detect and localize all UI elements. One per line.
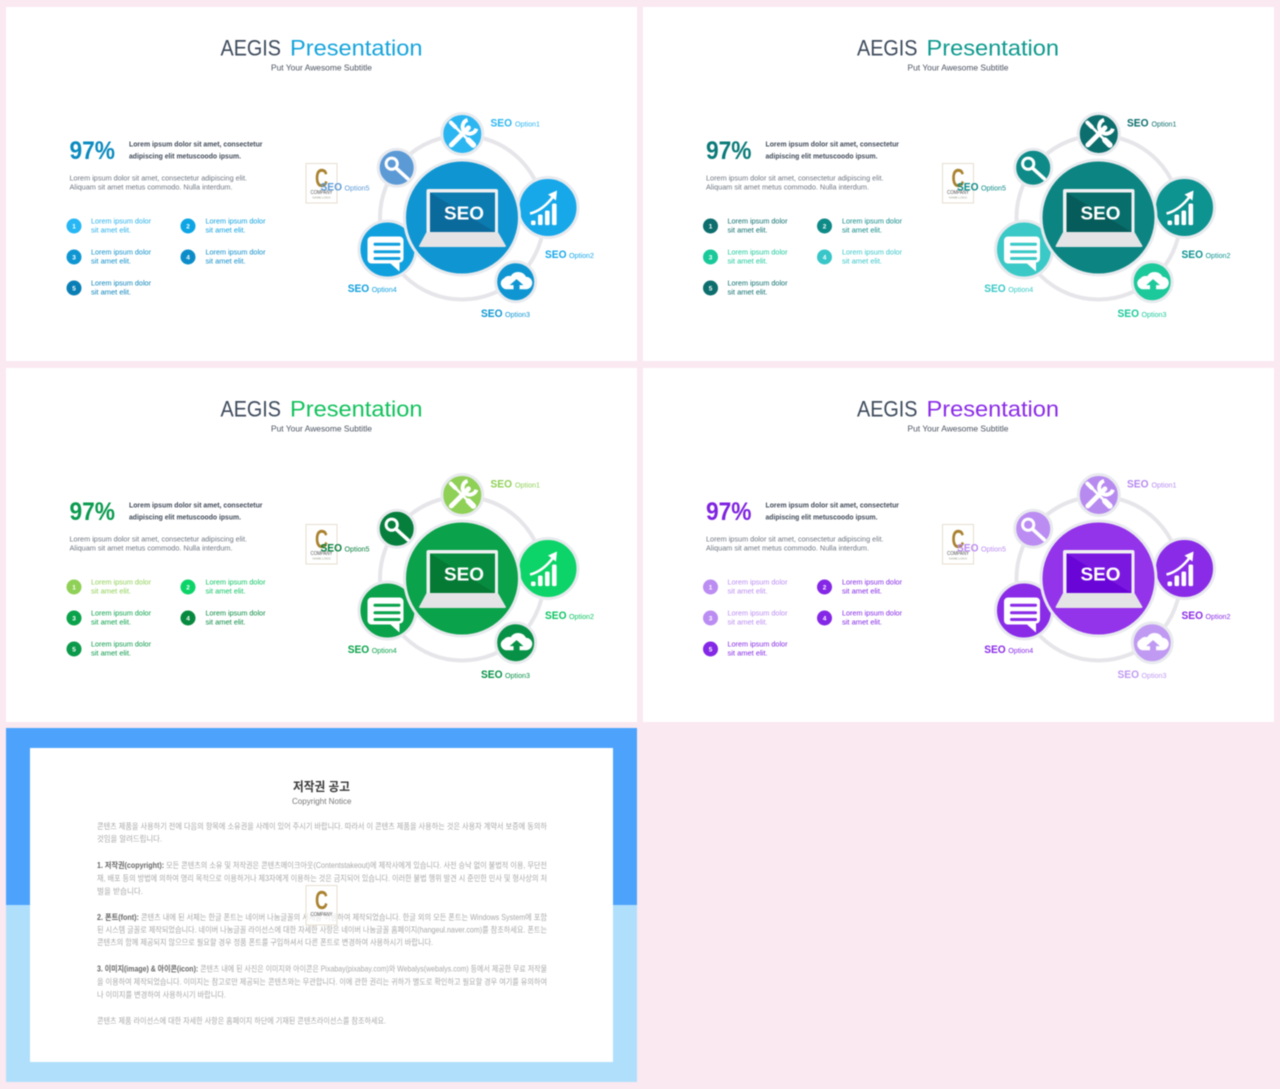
notice section 1	[97, 860, 547, 896]
label: option 3: Option3	[1142, 310, 1166, 319]
icon: tools	[442, 474, 483, 516]
label: option 3: SEO	[481, 669, 503, 681]
icon: growth chart	[518, 538, 578, 598]
label: option 1: SEO	[1127, 118, 1149, 130]
label: option 5: SEO	[957, 182, 979, 194]
list: five items	[703, 578, 903, 658]
notice section 1: 1. 저작권(copyright): 모든 콘텐츠의 소유 및 저작권은 콘텐츠메이크아웃(Contentstakeout)에 제작사에게 있습니다. 사전 승낙 없이 불법적 이용, 무단전	[97, 860, 547, 870]
list: five items: 5	[72, 286, 76, 292]
subtitle: Put Your Awesome Subtitle	[908, 62, 1009, 72]
title	[220, 396, 422, 422]
logo watermark: COMPANY	[310, 912, 333, 918]
list: five items: 2	[823, 584, 827, 592]
icon: search	[378, 510, 415, 547]
notice intro: 것임을 알려드립니다.	[97, 834, 162, 844]
list: five items: 4	[823, 616, 827, 622]
icon: laptop with SEO	[1041, 160, 1156, 275]
notice section 3: 을 이용하여 제작되었습니다. 이미지는 참고로만 제공되는 콘텐츠와는 무관합니다. 이에 관한 권리는 귀하가 별도로 확인하고 필요할 경우 여기를 유의하여	[97, 976, 547, 986]
list: five items: sit amet elit.	[728, 618, 768, 626]
stat heading: adipiscing elit metuscoodo ipsum.	[766, 512, 878, 522]
list: five items: Lorem ipsum dolor	[91, 278, 152, 288]
panel: teal slide	[643, 7, 1274, 361]
body text: Aliquam sit amet metus commodo. Nulla interdum.	[706, 182, 869, 192]
label: option 5: SEO	[320, 542, 342, 554]
icon: growth chart	[518, 178, 578, 238]
icon: chat	[359, 582, 416, 639]
label: option 3	[481, 308, 530, 320]
icon: laptop with SEO	[404, 521, 520, 636]
list: five items: Lorem ipsum dolor	[206, 608, 266, 618]
label: option 5: SEO	[320, 182, 342, 194]
title: Presentation	[926, 396, 1059, 422]
list: five items: sit amet elit.	[728, 288, 768, 296]
label: option 5: SEO	[957, 542, 979, 554]
body text	[706, 174, 884, 192]
list: five items: sit amet elit.	[206, 226, 246, 234]
body text	[70, 174, 247, 192]
list: five items: Lorem ipsum dolor	[842, 216, 903, 226]
body text: Lorem ipsum dolor sit amet, consectetur adipiscing elit.	[70, 534, 247, 544]
notice subheading: Copyright Notice	[292, 796, 352, 806]
logo watermark: NAME LOGO	[312, 196, 331, 200]
label: option 2	[1182, 610, 1230, 622]
stat heading: Lorem ipsum dolor sit amet, consectetur	[766, 140, 899, 148]
subtitle: Put Your Awesome Subtitle	[908, 424, 1009, 434]
stat heading	[766, 500, 899, 522]
diagram: SEO hub	[957, 114, 1230, 320]
logo watermark: COMPANY	[310, 190, 333, 196]
list: five items: 1	[72, 584, 76, 592]
list: five items: sit amet elit.	[206, 618, 246, 626]
list: five items: 3	[72, 254, 76, 262]
notice section 1: 재, 배포 등의 방법에 의하여 영리 목적으로 이용하거나 제3자에게 이용하는 것은 금지되어 있습니다. 이러한 불법 행위 발견 시 준민한 민사 및 형사상의 처	[97, 873, 547, 883]
list: five items: sit amet elit.	[206, 256, 246, 266]
body text: Lorem ipsum dolor sit amet, consectetur adipiscing elit.	[706, 534, 884, 544]
list: five items: 4	[186, 616, 190, 622]
label: option 5: Option5	[344, 184, 370, 192]
icon: chat	[996, 582, 1052, 639]
label: option 1: Option1	[515, 120, 540, 128]
label: option 4	[984, 283, 1033, 295]
list: five items: Lorem ipsum dolor	[728, 216, 788, 226]
label: option 3: Option3	[1142, 671, 1166, 680]
list: five items: sit amet elit.	[842, 618, 882, 626]
label: option 3: Option3	[505, 671, 530, 680]
diagram: SEO hub	[957, 474, 1230, 681]
label: option 4: Option4	[1008, 285, 1033, 294]
list: five items: sit amet elit.	[728, 256, 768, 266]
list: five items: 3	[709, 254, 713, 262]
label: option 3: SEO	[1118, 308, 1139, 320]
list: five items: Lorem ipsum dolor	[91, 248, 152, 256]
label: option 1	[490, 478, 540, 490]
icon: cloud upload	[1132, 262, 1172, 302]
icon: search	[378, 149, 415, 186]
label: option 1	[490, 118, 540, 130]
title: Presentation	[290, 36, 422, 60]
label: option 2	[1182, 249, 1230, 261]
logo watermark: C	[952, 163, 965, 193]
list: five items: sit amet elit.	[728, 648, 768, 658]
title: AEGIS	[220, 396, 281, 422]
list: five items: sit amet elit.	[91, 648, 131, 658]
list: five items: sit amet elit.	[842, 586, 882, 596]
logo watermark: NAME LOGO	[949, 196, 968, 200]
logo watermark	[942, 524, 974, 564]
notice section 3	[97, 964, 547, 1000]
title	[220, 36, 422, 60]
notice closing line: 콘텐츠 제품 라이선스에 대한 자세한 사항은 홈페이지 하단에 기재된 콘텐츠라이선스를 참조하세요.	[97, 1016, 386, 1026]
label: option 1: Option1	[1152, 480, 1176, 490]
icon: growth chart	[1154, 178, 1214, 238]
label: option 4	[984, 644, 1033, 656]
notice section 3: 3. 이미지(image) & 아이콘(icon): 콘텐츠 내에 된 사진은 이미지와 아이콘은 Pixabay(pixabay.com)와 Webalys(webalys.com) 등에서 제공한 무료 저작물	[97, 964, 547, 974]
label: option 5	[957, 182, 1006, 194]
label: option 5: Option5	[344, 544, 370, 554]
list: five items: Lorem ipsum dolor	[728, 278, 788, 288]
label: option 4: Option4	[1008, 646, 1033, 655]
logo watermark	[942, 163, 974, 203]
icon: laptop with SEO: SEO	[444, 564, 484, 584]
list: five items	[66, 578, 266, 658]
label: option 2: Option2	[1206, 612, 1230, 621]
list: five items: Lorem ipsum dolor	[842, 608, 903, 618]
stat heading: adipiscing elit metuscoodo ipsum.	[129, 512, 241, 522]
logo watermark	[306, 163, 337, 203]
notice section 2: 된 시스템 글꼴로 제작되었습니다. 네이버 나눔글꼴 라이선스에 대한 자세한 사항은 네이버 나눔글꼴 홈페이지(hangeul.naver.com)를 참조하세요. 폰트는	[97, 924, 547, 934]
panel: blue slide	[6, 7, 637, 361]
list: five items: Lorem ipsum dolor	[91, 608, 152, 618]
stat heading: Lorem ipsum dolor sit amet, consectetur	[766, 500, 899, 510]
label: option 1	[1127, 118, 1176, 130]
label: option 2: SEO	[545, 610, 567, 622]
stat heading	[129, 500, 263, 522]
icon: tools	[442, 114, 483, 154]
label: option 2: Option2	[569, 251, 594, 260]
list: five items: Lorem ipsum dolor	[842, 578, 903, 586]
title	[857, 396, 1059, 422]
title	[857, 36, 1059, 60]
list: five items: 3	[709, 616, 713, 622]
body text: Aliquam sit amet metus commodo. Nulla interdum.	[70, 544, 232, 552]
list: five items: Lorem ipsum dolor	[728, 248, 788, 256]
logo watermark: NAME LOGO	[949, 556, 968, 560]
list: five items: 2	[186, 584, 190, 592]
list: five items: Lorem ipsum dolor	[728, 640, 788, 648]
list: five items: Lorem ipsum dolor	[91, 216, 152, 226]
logo watermark: COMPANY	[947, 190, 970, 196]
label: option 3	[1118, 308, 1166, 320]
label: option 1: SEO	[1127, 478, 1149, 490]
icon: laptop with SEO	[1041, 521, 1156, 636]
list: five items: sit amet elit.	[728, 226, 768, 234]
diagram: SEO hub	[320, 114, 594, 320]
notice intro: 콘텐츠 제품을 사용하기 전에 다음의 항목에 소유권을 사례이 있어 주시기 바랍니다. 따라서 이 콘텐츠 제품을 사용하는 것은 사용자 계약서 보증에 동의하	[97, 821, 547, 831]
label: option 3: SEO	[481, 308, 503, 320]
icon: cloud upload	[496, 262, 536, 302]
subtitle: Put Your Awesome Subtitle	[271, 424, 372, 434]
list: five items: sit amet elit.	[91, 288, 131, 296]
logo watermark	[306, 524, 337, 564]
label: option 4	[348, 283, 397, 295]
stat heading: adipiscing elit metuscoodo ipsum.	[129, 152, 241, 160]
title: Presentation	[926, 36, 1059, 60]
icon: laptop with SEO	[404, 160, 520, 275]
list: five items: 3	[72, 616, 76, 622]
stat heading: Lorem ipsum dolor sit amet, consectetur	[129, 500, 263, 510]
stat heading: adipiscing elit metuscoodo ipsum.	[766, 152, 878, 160]
list: five items: 1	[709, 224, 713, 230]
panel: purple slide	[643, 368, 1274, 722]
icon: tools	[1078, 114, 1119, 154]
list: five items: 2	[186, 224, 190, 230]
list: five items: Lorem ipsum dolor	[206, 248, 266, 256]
icon: laptop with SEO: SEO	[1080, 202, 1120, 224]
label: option 3: Option3	[505, 310, 530, 319]
label: option 5	[320, 182, 370, 194]
label: option 5: Option5	[981, 184, 1006, 192]
label: option 1: Option1	[1152, 120, 1176, 128]
label: option 2: SEO	[545, 249, 567, 261]
label: option 4	[348, 644, 397, 656]
subtitle: Put Your Awesome Subtitle	[271, 62, 372, 72]
label: option 5: Option5	[981, 544, 1006, 554]
label: option 1	[1127, 478, 1176, 490]
label: option 2: Option2	[1206, 251, 1230, 260]
icon: chat	[996, 221, 1052, 278]
list: five items: 5	[72, 646, 76, 654]
label: option 1: Option1	[515, 480, 540, 490]
icon: cloud upload	[1132, 623, 1172, 663]
body text	[70, 534, 247, 552]
list: five items: sit amet elit.	[728, 586, 768, 596]
icon: search	[1015, 510, 1052, 547]
icon: cloud upload	[496, 623, 536, 663]
label: option 3: SEO	[1118, 669, 1139, 681]
label: option 5	[957, 542, 1006, 554]
list: five items: Lorem ipsum dolor	[842, 248, 903, 256]
list: five items: Lorem ipsum dolor	[206, 578, 266, 586]
list: five items: Lorem ipsum dolor	[91, 640, 152, 648]
logo watermark	[306, 885, 337, 925]
list: five items: Lorem ipsum dolor	[728, 578, 788, 586]
label: option 5	[320, 542, 370, 554]
label: option 4: SEO	[348, 283, 369, 295]
icon: tools	[1078, 474, 1119, 516]
list: five items: 4	[186, 254, 190, 262]
label: option 4: SEO	[984, 283, 1006, 295]
notice section 2	[97, 912, 547, 947]
label: option 1: SEO	[490, 118, 512, 130]
label: option 4: SEO	[348, 644, 369, 656]
label: option 2: Option2	[569, 612, 594, 621]
panel: green slide	[6, 368, 637, 722]
label: option 2	[545, 249, 594, 261]
notice section 3: 나 이미지를 변경하여 사용하시기 바랍니다.	[97, 990, 226, 1000]
notice intro	[97, 821, 547, 844]
list: five items: sit amet elit.	[91, 226, 131, 234]
title: AEGIS	[857, 36, 918, 60]
icon: search	[1015, 149, 1052, 186]
icon: growth chart	[1154, 538, 1214, 598]
body text: Aliquam sit amet metus commodo. Nulla interdum.	[706, 544, 869, 552]
title: AEGIS	[857, 396, 918, 422]
label: option 3	[1118, 669, 1166, 681]
body text	[706, 534, 884, 552]
label: option 2	[545, 610, 594, 622]
list: five items: sit amet elit.	[91, 256, 131, 266]
stat: 97%: 97%	[70, 137, 115, 165]
notice section 1: 벌을 받습니다.	[97, 886, 143, 896]
logo watermark: C	[315, 524, 328, 554]
list: five items: sit amet elit.	[842, 256, 882, 266]
title: AEGIS	[220, 36, 281, 60]
logo watermark: COMPANY	[310, 551, 333, 557]
label: option 2: SEO	[1182, 610, 1203, 622]
title: Presentation	[290, 396, 422, 422]
list: five items	[66, 216, 266, 296]
list: five items: 1	[72, 224, 76, 230]
list: five items: 1	[709, 584, 713, 592]
list: five items: sit amet elit.	[842, 226, 882, 234]
stat: 97%: 97%	[706, 498, 752, 526]
list: five items: sit amet elit.	[91, 586, 131, 596]
list: five items: 5	[709, 286, 713, 292]
stat heading	[766, 140, 899, 160]
icon: chat	[359, 221, 416, 278]
icon: laptop with SEO: SEO	[1080, 564, 1120, 584]
label: option 4: Option4	[372, 646, 397, 655]
stat heading: Lorem ipsum dolor sit amet, consectetur	[129, 140, 263, 148]
label: option 4: SEO	[984, 644, 1006, 656]
list: five items: 2	[823, 224, 827, 230]
icon: laptop with SEO: SEO	[444, 202, 484, 224]
notice section 2: 2. 폰트(font): 콘텐츠 내에 된 서체는 한글 폰트는 네이버 나눔글꼴의 서체를 이용하여 제작되었습니다. 한글 외의 모든 폰트는 Windows System에 포함	[97, 912, 547, 922]
body text: Lorem ipsum dolor sit amet, consectetur adipiscing elit.	[706, 174, 884, 182]
notice heading: 저작권 공고	[293, 779, 350, 794]
panel: copyright notice	[6, 728, 637, 1082]
list: five items: sit amet elit.	[91, 618, 131, 626]
list: five items: 4	[823, 254, 827, 262]
stat: 97%: 97%	[70, 498, 115, 526]
label: option 2: SEO	[1182, 249, 1203, 261]
list: five items: Lorem ipsum dolor	[206, 216, 266, 226]
list: five items: sit amet elit.	[206, 586, 246, 596]
notice section 2: 콘텐츠의 함께 제공되지 않으므로 필요할 경우 정품 폰트를 구입하셔서 다른 폰트로 변경하여 사용하시기 바랍니다.	[97, 937, 433, 947]
body text: Aliquam sit amet metus commodo. Nulla interdum.	[70, 182, 232, 192]
list: five items: Lorem ipsum dolor	[91, 578, 152, 586]
label: option 1: SEO	[490, 478, 512, 490]
logo watermark: NAME LOGO	[312, 556, 331, 560]
stat heading	[129, 140, 263, 160]
body text: Lorem ipsum dolor sit amet, consectetur adipiscing elit.	[70, 174, 247, 182]
diagram: SEO hub	[320, 474, 594, 681]
logo watermark: COMPANY	[947, 551, 970, 557]
list: five items	[703, 216, 903, 296]
logo watermark: C	[315, 885, 328, 915]
list: five items: 5	[709, 646, 713, 654]
label: option 3	[481, 669, 530, 681]
list: five items: Lorem ipsum dolor	[728, 608, 788, 618]
logo watermark: C	[315, 163, 328, 193]
stat: 97%: 97%	[706, 137, 752, 165]
label: option 4: Option4	[372, 285, 397, 294]
logo watermark: C	[952, 524, 965, 554]
